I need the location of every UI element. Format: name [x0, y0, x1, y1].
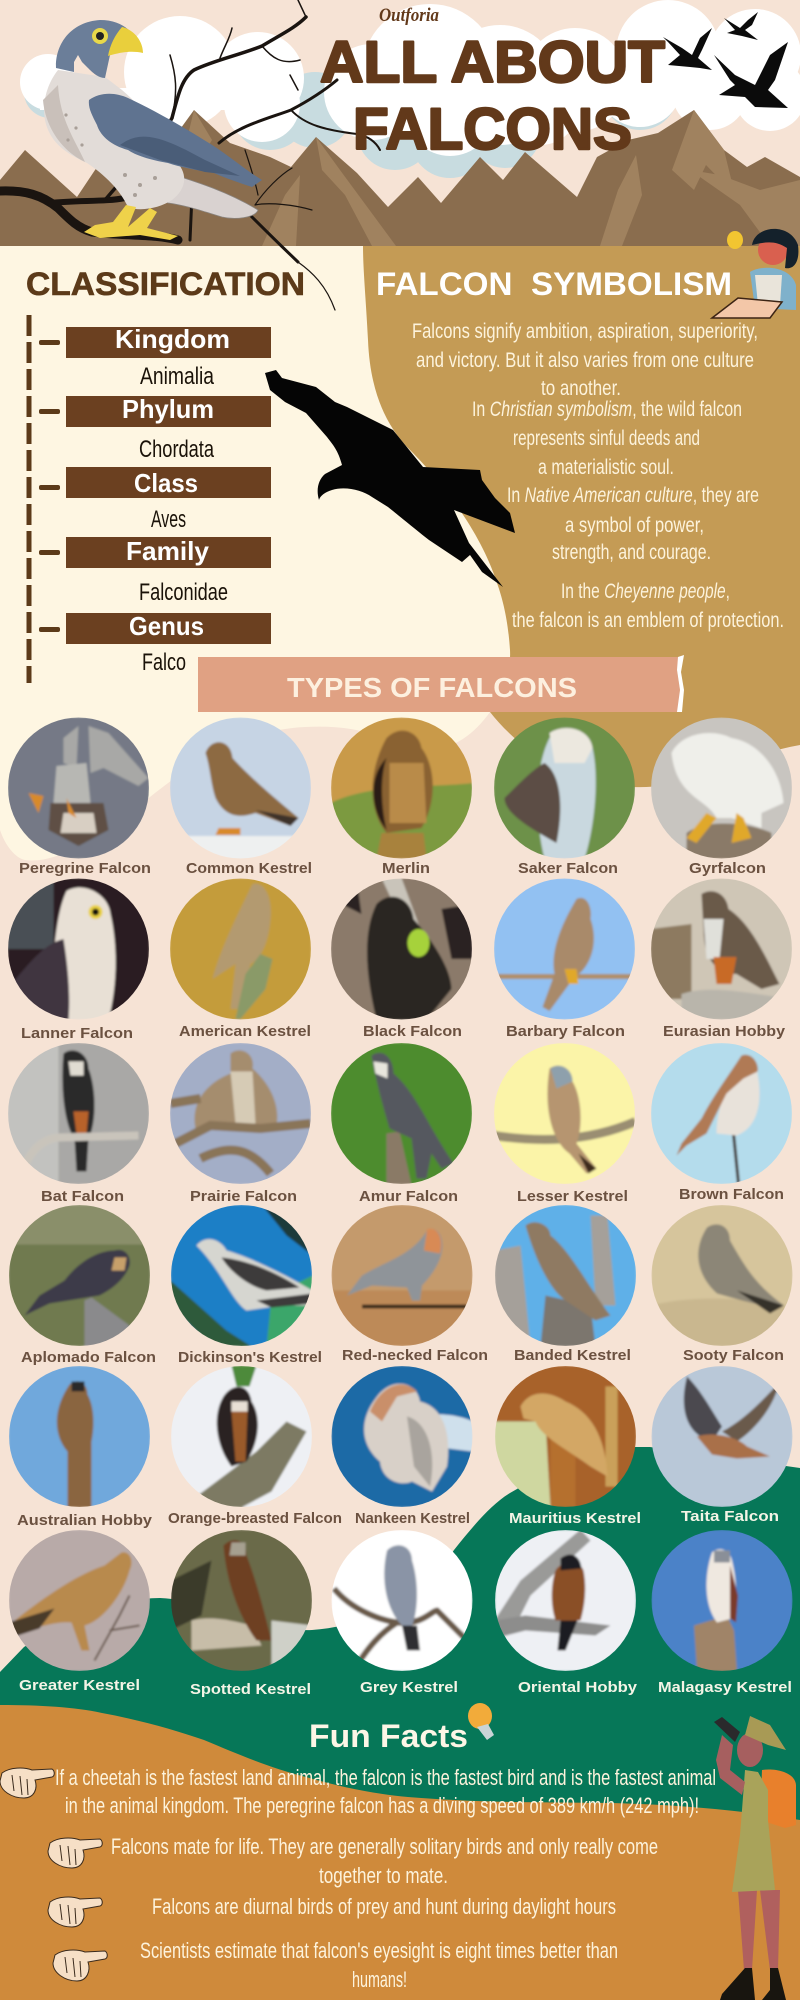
- photo: [650, 717, 792, 859]
- name: Bat Falcon: [41, 1188, 124, 1205]
- bulb glass: [468, 1703, 492, 1729]
- name: Barbary Falcon: [506, 1023, 625, 1040]
- photo: [494, 717, 636, 859]
- hat: [745, 1716, 786, 1750]
- photo: [494, 878, 636, 1020]
- name: American Kestrel: [179, 1023, 311, 1040]
- photo: [494, 1204, 636, 1346]
- card: Lanner Falcon: [8, 878, 150, 1042]
- photo: [650, 878, 792, 1020]
- icon: branches: [0, 0, 380, 310]
- photo: [8, 717, 150, 859]
- heading: fun facts: Fun Facts: [309, 1718, 468, 1754]
- face: [758, 235, 788, 265]
- photo: [8, 878, 150, 1020]
- icon: explorer with binoculars: [714, 1716, 796, 2000]
- binoculars: [714, 1717, 740, 1742]
- card: Malagasy Kestrel: [651, 1530, 793, 1696]
- wing: [89, 94, 262, 187]
- name: Mauritius Kestrel: [509, 1510, 641, 1527]
- text: symbolism paragraphs: strength, and courage.: [552, 541, 711, 564]
- card: Merlin: [330, 717, 472, 877]
- icon: pointing hand 2: [48, 1838, 102, 1868]
- rank names: Kingdom: [115, 324, 230, 354]
- photo: [651, 1204, 793, 1346]
- name: Nankeen Kestrel: [355, 1510, 470, 1527]
- name: Saker Falcon: [518, 860, 618, 877]
- panel: green band: [0, 1447, 800, 1830]
- card: Grey Kestrel: [331, 1530, 473, 1696]
- rank names: [115, 324, 230, 641]
- name: Malagasy Kestrel: [658, 1679, 792, 1696]
- beak: [108, 27, 143, 56]
- photo: [651, 1366, 793, 1508]
- arm: [716, 1735, 745, 1795]
- hair: [752, 229, 798, 268]
- card: Mauritius Kestrel: [494, 1366, 641, 1527]
- card: Australian Hobby: [8, 1366, 153, 1529]
- rank bars: [66, 327, 271, 644]
- name: Gyrfalcon: [689, 860, 766, 877]
- name: Spotted Kestrel: [190, 1681, 311, 1698]
- photo: [494, 1366, 636, 1508]
- icon: kid reading with bulb: [712, 229, 798, 318]
- rank values: [139, 363, 228, 676]
- card: Peregrine Falcon: [8, 717, 151, 877]
- card: Lesser Kestrel: [494, 1042, 636, 1205]
- photo: [170, 1042, 312, 1184]
- title line 2: FALCONS: [353, 97, 632, 162]
- text: symbolism paragraphs: represents sinful deeds and: [513, 427, 700, 450]
- panel: header scene: [0, 0, 800, 246]
- rank values: Aves: [151, 506, 186, 533]
- icon: light bulb: [468, 1703, 494, 1740]
- heading: classification: CLASSIFICATION: [26, 266, 305, 302]
- name: Oriental Hobby: [518, 1679, 638, 1696]
- chest: [44, 70, 184, 209]
- photo: [651, 1530, 793, 1672]
- tick marks: [39, 340, 60, 632]
- name: Black Falcon: [363, 1023, 462, 1040]
- photo: [8, 1530, 150, 1672]
- photo: [494, 1530, 636, 1672]
- text: symbolism paragraphs: a symbol of power,: [565, 514, 704, 537]
- card: Banded Kestrel: [494, 1204, 636, 1364]
- photo: [170, 878, 312, 1020]
- card: Brown Falcon: [650, 1042, 792, 1203]
- name: Aplomado Falcon: [21, 1349, 156, 1366]
- card: Spotted Kestrel: [170, 1530, 312, 1698]
- title line 1: ALL ABOUT: [320, 30, 665, 95]
- panel: classification background: [0, 246, 520, 860]
- chest speckles: [64, 113, 157, 197]
- name: Merlin: [382, 860, 430, 877]
- card: Dickinson's Kestrel: [170, 1204, 322, 1366]
- photo: [170, 1204, 312, 1346]
- eye: [92, 28, 108, 44]
- photo: [8, 1366, 150, 1508]
- name: Orange-breasted Falcon: [168, 1510, 342, 1527]
- rank values: Falconidae: [139, 579, 228, 606]
- shirt: [750, 268, 796, 310]
- cloud shadows: [24, 54, 678, 178]
- photo: [331, 1366, 473, 1508]
- rank values: Chordata: [139, 436, 214, 463]
- bulb: [727, 231, 743, 249]
- mountains: [0, 110, 800, 246]
- name: Prairie Falcon: [190, 1188, 297, 1205]
- card: Barbary Falcon: [494, 878, 636, 1040]
- photo: [170, 1530, 312, 1672]
- icon: three crows: [663, 12, 788, 108]
- banner: types of falcons: [198, 655, 684, 712]
- photo: [494, 1042, 636, 1184]
- text: symbolism paragraphs: In Christian symbolism, the wild falcon: [472, 398, 742, 421]
- logo: Outforia: Outforia: [379, 5, 439, 26]
- legs and feet: [84, 205, 178, 240]
- legs: [738, 1890, 780, 1970]
- text: fun facts: Falcons are diurnal birds of prey and hunt during daylight hours: [152, 1894, 616, 1919]
- card: Red-necked Falcon: [331, 1204, 488, 1364]
- photo: [8, 1042, 150, 1184]
- card: Orange-breasted Falcon: [168, 1366, 342, 1527]
- photo: [330, 717, 472, 859]
- photo: [8, 1204, 150, 1346]
- mountain highlights: [188, 110, 800, 246]
- rank names: Genus: [129, 611, 204, 641]
- text: fun facts: [55, 1765, 716, 1992]
- text: symbolism paragraphs: a materialistic soul.: [538, 456, 674, 479]
- name: Greater Kestrel: [19, 1677, 140, 1694]
- card: Gyrfalcon: [650, 717, 792, 877]
- card: Common Kestrel: [170, 717, 312, 877]
- text: symbolism paragraphs: In the Cheyenne people,: [561, 580, 730, 603]
- card: Sooty Falcon: [651, 1204, 793, 1364]
- dress: [732, 1770, 775, 1892]
- panel: fun facts background: [0, 1705, 800, 2000]
- name: Sooty Falcon: [683, 1347, 784, 1364]
- icon: pointing hand 4: [53, 1950, 107, 1981]
- photo: [330, 1042, 472, 1184]
- icon: soaring falcon silhouette: [265, 370, 515, 587]
- heading: falcon symbolism: FALCON SYMBOLISM: [376, 266, 732, 302]
- text: symbolism paragraphs: In Native American culture, they are: [507, 484, 759, 507]
- name: Australian Hobby: [17, 1512, 153, 1529]
- name: Amur Falcon: [359, 1188, 458, 1205]
- card: Prairie Falcon: [170, 1042, 312, 1205]
- name: Dickinson's Kestrel: [178, 1349, 322, 1366]
- card: Eurasian Hobby: [650, 878, 792, 1040]
- rank names: Family: [126, 536, 210, 566]
- card: Black Falcon: [330, 878, 472, 1040]
- face: [737, 1733, 763, 1767]
- icon: pointing hand 3: [48, 1897, 102, 1927]
- dashed spine: [26, 315, 32, 683]
- banner title: TYPES OF FALCONS: [287, 672, 577, 703]
- photo: [331, 1204, 473, 1346]
- backpack: [760, 1770, 796, 1828]
- card: Nankeen Kestrel: [331, 1366, 473, 1527]
- text: fun facts: humans!: [352, 1967, 407, 1992]
- name: Red-necked Falcon: [342, 1347, 488, 1364]
- text: symbolism paragraphs: to another.: [541, 377, 621, 400]
- text: fun facts: together to mate.: [319, 1863, 448, 1888]
- card: Greater Kestrel: [8, 1530, 150, 1694]
- clouds: [20, 0, 800, 156]
- photo: [170, 717, 312, 860]
- name: Lesser Kestrel: [517, 1188, 628, 1205]
- card: Saker Falcon: [494, 717, 636, 877]
- card: Amur Falcon: [330, 1042, 472, 1205]
- card: Aplomado Falcon: [8, 1204, 156, 1366]
- tail feathers: [158, 172, 258, 218]
- bulb base: [477, 1724, 494, 1740]
- photo: [650, 1042, 792, 1184]
- name: Eurasian Hobby: [663, 1023, 786, 1040]
- chart: taxonomy ladder: [29, 315, 271, 683]
- card: Oriental Hobby: [494, 1530, 638, 1696]
- name: Brown Falcon: [679, 1186, 784, 1203]
- boots: [720, 1968, 786, 2000]
- photo: [330, 878, 472, 1020]
- torn paper strip: [198, 657, 680, 712]
- photo: [331, 1530, 473, 1672]
- photo: [170, 1366, 312, 1508]
- rank names: Class: [134, 468, 198, 498]
- name: Taita Falcon: [681, 1508, 779, 1525]
- rank names: Phylum: [122, 394, 214, 424]
- title: [320, 30, 665, 162]
- card: American Kestrel: [170, 878, 312, 1040]
- name: Grey Kestrel: [360, 1679, 458, 1696]
- card: Bat Falcon: [8, 1042, 150, 1205]
- name: Lanner Falcon: [21, 1025, 133, 1042]
- icon: peregrine illustration: [43, 20, 262, 240]
- panel: symbolism background: [363, 246, 800, 787]
- text: fun facts: Scientists estimate that falcon's eyesight is eight times better than: [140, 1938, 618, 1963]
- name: Common Kestrel: [186, 860, 312, 877]
- book: [712, 298, 782, 318]
- text: symbolism paragraphs: [412, 320, 784, 632]
- rank values: Falco: [142, 649, 186, 676]
- card: Taita Falcon: [651, 1366, 793, 1525]
- head: [56, 20, 134, 78]
- rank values: Animalia: [140, 363, 215, 390]
- name: Banded Kestrel: [514, 1347, 631, 1364]
- name: Peregrine Falcon: [19, 860, 151, 877]
- icon: pointing hand 1: [0, 1768, 54, 1798]
